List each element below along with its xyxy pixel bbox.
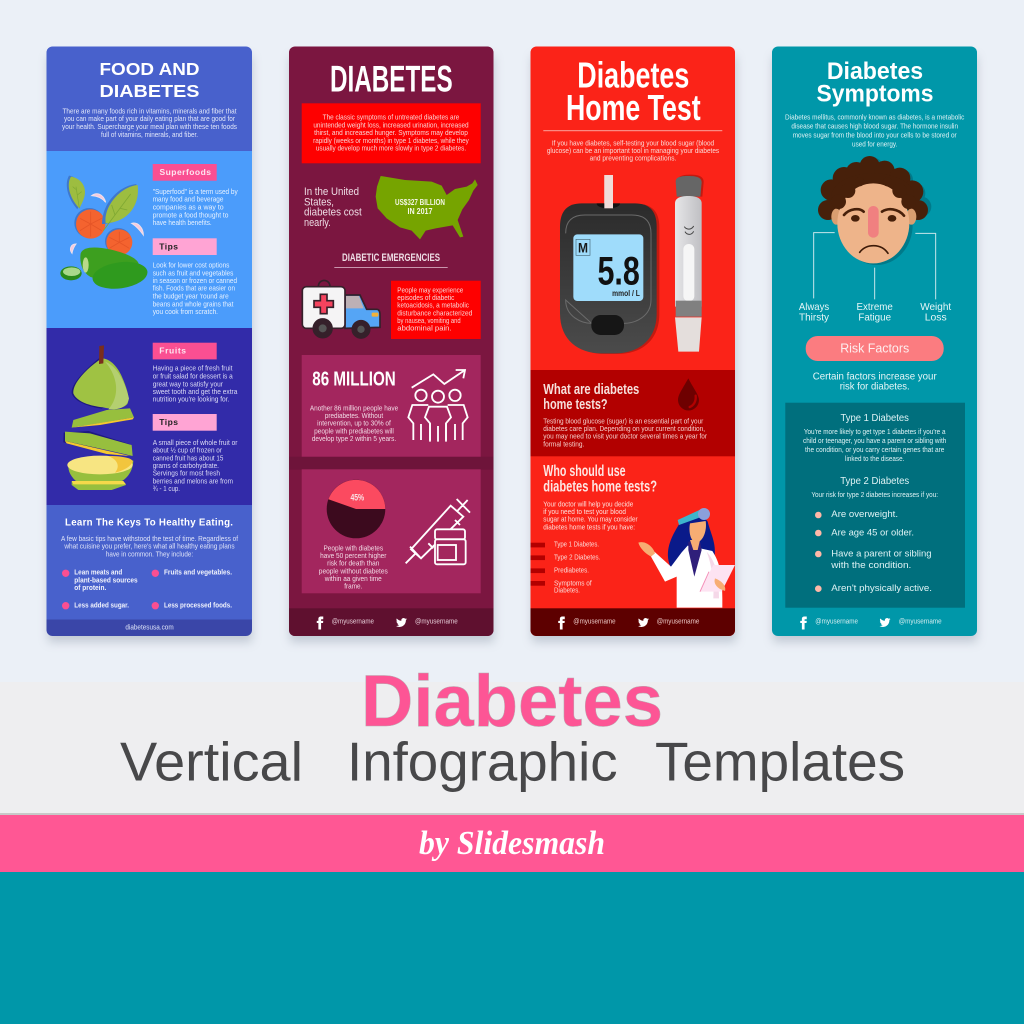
text: type 1 diabetes: child or teenager, you have a parent or sibling with — [803, 438, 946, 445]
text: certain factors — [813, 371, 937, 393]
footer: social handles — [317, 616, 458, 630]
subtitle: vertical infographic templates: Templates — [655, 731, 905, 793]
list: healthy eating bullets: Less added sugar. — [74, 600, 129, 609]
text: what are home tests: diabetes care plan. Depending on your current condition, — [543, 424, 705, 433]
illustration: glucose meter — [560, 175, 659, 354]
footer: social handles: @myusername — [815, 619, 858, 626]
heading: food and diabetes — [100, 63, 199, 97]
band: by slidesmash: by Slidesmash — [419, 825, 605, 862]
panel: 86 million stat: develop type 2 within 5 years. — [312, 434, 396, 443]
text: who should use — [543, 499, 638, 531]
tag: fruit tips — [153, 414, 217, 431]
footer: social handles: @myusername — [573, 619, 616, 626]
intro text — [62, 106, 237, 139]
illustration: glucose meter: mmol / L — [612, 289, 640, 298]
heading: who should use: diabetes home tests? — [543, 479, 657, 496]
text: home test intro: If you have diabetes, self-testing your blood sugar (blood — [552, 138, 714, 147]
panel: risk of death stat — [302, 469, 481, 593]
heading: diabetes home test: Diabetes — [577, 54, 689, 95]
text: symptoms intro: used for energy. — [852, 139, 897, 148]
panel: 86 million stat: Another 86 million people have — [310, 403, 398, 412]
list: test conditions: Prediabetes. — [554, 566, 589, 575]
heading: what are home tests — [543, 383, 639, 409]
text: type 2 diabetes: Your risk for type 2 diabetes increases if you: — [811, 492, 938, 499]
text: superfood tips: you cook from scratch. — [153, 307, 218, 316]
band: by slidesmash — [0, 813, 1024, 872]
list: test conditions — [530, 540, 600, 595]
text: superfood tips: fish. Foods that are easier on — [153, 284, 235, 293]
list: test conditions: Diabetes. — [554, 586, 580, 595]
panel: 86 million stat: people with prediabetes will — [314, 426, 394, 435]
text: type 1 diabetes: Type 1 Diabetes — [841, 413, 909, 424]
text: who should use: diabetes home tests if you have: — [543, 522, 635, 531]
labels: symptoms — [799, 301, 951, 323]
icon: ambulance — [302, 280, 380, 338]
heading: what are home tests: home tests? — [543, 396, 608, 413]
list: healthy eating bullets: plant-based sources — [74, 575, 138, 584]
heading: who should use: Who should use — [543, 463, 626, 480]
footer: social handles: @myusername — [899, 619, 942, 626]
callout: classic symptoms: The classic symptoms of untreated diabetes are — [323, 112, 459, 121]
illustration: doctor — [638, 508, 735, 608]
panel: food and diabetes — [46, 46, 252, 636]
chart: 45 percent pie: 45% — [350, 493, 364, 503]
subtitle: vertical infographic templates — [120, 731, 905, 793]
heading: diabetic emergencies: DIABETIC EMERGENCIES — [342, 252, 440, 264]
map: united states cost: IN 2017 — [408, 207, 433, 216]
callout: ketoacidosis: by nausea, vomiting and — [397, 316, 461, 325]
list: healthy eating bullets: of protein. — [74, 583, 106, 592]
text: certain factors: risk for diabetes. — [840, 381, 910, 393]
text: fruit tips: canned fruit has about 15 — [153, 453, 223, 462]
text: superfood tips: beans and whole grains that — [153, 299, 233, 308]
text: type 1 diabetes: You're more likely to get type 1 diabetes if you're a — [804, 429, 946, 436]
callout: ketoacidosis: episodes of diabetic — [397, 293, 455, 302]
tag: fruits: Fruits — [159, 345, 186, 355]
labels: symptoms: Weight — [920, 301, 951, 313]
panel: diabetes home test — [530, 46, 735, 636]
icon: syringe and vial — [406, 499, 470, 564]
panel: diabetes — [289, 46, 494, 636]
text: type 1 diabetes: linked to the disease. — [845, 456, 904, 463]
footer: website: diabetesusa.com — [125, 624, 174, 631]
map: united states cost — [376, 176, 478, 239]
panel: 86 million stat: 86 MILLION — [312, 369, 396, 391]
heading: healthy eating: Learn The Keys To Healthy Eating. — [65, 517, 233, 528]
panel: 86 million stat: prediabetes. Without — [325, 411, 383, 420]
text: healthy eating intro: have in common. They include: — [106, 550, 193, 559]
illustration: sliced pear — [63, 345, 134, 490]
text: superfood definition: have health benefits. — [153, 218, 212, 227]
footer: social handles: @myusername — [657, 619, 699, 626]
callout: classic symptoms: rapidly (weeks or months) in type 1 diabetes, while they — [313, 136, 469, 145]
tag: superfoods: Superfoods — [160, 167, 211, 177]
footer: social handles: @myusername — [332, 619, 374, 626]
text: certain factors: Certain factors increase your — [813, 371, 937, 383]
text: fruits: sweet tooth and get the extra — [153, 387, 238, 396]
text: fruit tips: Servings for most fresh — [153, 469, 220, 478]
subtitle: vertical infographic templates: Vertical — [120, 731, 303, 793]
labels: symptoms: Extreme — [857, 301, 893, 313]
list: test conditions: Symptoms of — [554, 578, 593, 587]
text: type 2 diabetes: Type 2 Diabetes — [840, 476, 909, 487]
illustration: vegetables — [60, 176, 149, 292]
tag: tips — [153, 238, 217, 255]
list: test conditions: Type 2 Diabetes. — [554, 553, 600, 562]
text: type 2 diabetes — [811, 476, 938, 499]
text: fruit tips: berries and melons are from — [153, 476, 233, 485]
text: what are home tests: formal testing. — [543, 440, 584, 449]
text: fruits: nutrition you're looking for. — [153, 395, 229, 404]
text: fruit tips: A small piece of whole fruit or — [153, 438, 238, 447]
list: type 2 risk factors: Aren't physically active. — [831, 583, 932, 594]
text: risk of death: risk for death than — [327, 559, 379, 568]
text: who should use: sugar at home. You may consider — [543, 515, 638, 524]
text: home test intro — [547, 140, 719, 162]
panel: diabetes symptoms — [772, 46, 977, 636]
heading: diabetes home test — [568, 61, 700, 120]
callout: ketoacidosis — [391, 281, 481, 339]
text: what are home tests — [543, 416, 708, 449]
list: type 2 risk factors — [815, 509, 932, 594]
text: superfood tips: Look for lower cost options — [153, 261, 230, 270]
callout: classic symptoms — [302, 103, 481, 163]
list: type 2 risk factors: Are overweight. — [831, 509, 898, 520]
text: symptoms intro — [785, 112, 965, 148]
text: superfood definition: many food and beverage — [153, 195, 223, 204]
heading: diabetes: DIABETES — [330, 59, 453, 100]
text: superfood definition: companies as a way to — [153, 203, 224, 212]
footer: social handles — [800, 616, 942, 630]
text: fruits: great way to satisfy your — [153, 379, 223, 388]
intro text: you can make part of your daily eating plan that are good for — [64, 114, 235, 123]
list: healthy eating bullets: Lean meats and — [74, 568, 122, 577]
text: cost statement: diabetes cost — [304, 207, 362, 219]
text: superfood tips: the budget year 'round are — [153, 292, 229, 301]
heading: what are home tests: What are diabetes — [543, 381, 639, 398]
text: risk of death — [319, 543, 388, 591]
labels: symptoms: Loss — [925, 311, 947, 323]
button: risk factors — [806, 336, 944, 361]
callout: ketoacidosis: ketoacidosis, a metabolic — [397, 301, 469, 310]
heading: diabetes symptoms: Diabetes — [827, 58, 923, 85]
panel: 86 million stat — [302, 355, 481, 457]
text: fruits: or fruit salad for dessert is a — [153, 372, 234, 381]
illustration: glucose meter: M — [578, 240, 588, 256]
button: risk factors: Risk Factors — [840, 341, 909, 355]
subtitle: vertical infographic templates: Infographic — [347, 731, 618, 793]
heading: who should use — [543, 463, 657, 496]
list: type 2 risk factors: with the condition. — [830, 560, 911, 571]
text: healthy eating intro: what cuisine you prefer, here's what all healthy eating plans — [63, 542, 235, 551]
text: fruit tips: about ½ cup of frozen or — [153, 446, 222, 455]
intro text: full of vitamins, minerals, and fiber. — [101, 130, 198, 139]
illustration: sad face — [814, 156, 936, 299]
list: healthy eating bullets — [62, 568, 232, 609]
text: fruits — [153, 364, 238, 404]
text: healthy eating intro: A few basic tips have withstood the test of time. Regardless of — [61, 534, 239, 543]
text: risk of death: within aa given time — [324, 574, 382, 583]
text: cost statement: In the United — [304, 186, 359, 198]
text: risk of death: have 50 percent higher — [320, 551, 387, 560]
heading: diabetes symptoms: Symptoms — [816, 81, 934, 108]
callout: ketoacidosis: People may experience — [397, 285, 463, 294]
panel: 86 million stat: intervention, up to 30% of — [317, 419, 392, 428]
list: test conditions: Type 1 Diabetes. — [554, 540, 599, 549]
tag: fruit tips: Tips — [159, 417, 178, 427]
text: cost statement — [304, 186, 362, 229]
intro text: There are many foods rich in vitamins, minerals and fiber that — [62, 106, 236, 116]
tag: fruits — [153, 343, 217, 359]
icon: people with rising arrow — [408, 370, 468, 442]
text: who should use: Your doctor will help you decide — [543, 499, 633, 508]
tag: superfoods — [153, 164, 217, 181]
icon: blood drop — [678, 378, 699, 410]
text: home test intro: glucose) can be an important tool in managing your diabetes — [547, 146, 719, 155]
text: home test intro: and preventing complications. — [590, 154, 676, 163]
footer: social handles: @myusername — [415, 619, 458, 626]
text: type 1 diabetes — [803, 413, 946, 463]
heading: diabetes symptoms — [816, 58, 934, 108]
chart: 45 percent pie — [327, 480, 385, 538]
callout: classic symptoms: unintended weight loss, increased urination, increased — [313, 120, 469, 129]
text: superfood tips — [153, 261, 237, 316]
list: type 2 risk factors: Are age 45 or older. — [831, 528, 914, 539]
callout: ketoacidosis: abdominal pain. — [397, 324, 452, 333]
list: healthy eating bullets: Fruits and vegetables. — [164, 568, 232, 577]
map: united states cost: US$327 BILLION — [395, 198, 445, 207]
text: symptoms intro: Diabetes mellitus, commonly known as diabetes, is a metabolic — [785, 112, 965, 121]
text: risk of death: people without diabetes — [319, 566, 388, 575]
band: teal base — [0, 872, 1024, 1024]
text: who should use: if you need to test your blood — [543, 507, 626, 516]
heading: food and diabetes: DIABETES — [100, 81, 200, 101]
text: what are home tests: Testing blood glucose (sugar) is an essential part of your — [543, 416, 704, 425]
text: superfood tips: in season or frozen or canned — [153, 276, 237, 285]
text: superfood definition: "Superfood" is a term used by — [153, 187, 238, 196]
footer: social handles — [558, 616, 699, 630]
text: superfood tips: such as fruit and vegetables — [153, 268, 234, 277]
callout: classic symptoms: thirst, and increased hunger. Symptoms may develop — [314, 128, 468, 137]
list: type 2 risk factors: Have a parent or sibling — [831, 549, 932, 560]
callout: classic symptoms: usually develop much more slowly in type 2 diabetes. — [316, 144, 466, 153]
text: fruit tips: ¾ - 1 cup. — [153, 484, 180, 493]
text: cost statement: nearly. — [304, 217, 331, 229]
heading: food and diabetes: FOOD AND — [100, 59, 200, 79]
text: risk of death: People with diabetes — [323, 543, 383, 552]
text: superfood definition: promote a food thought to — [153, 210, 228, 219]
list: healthy eating bullets: Less processed foods. — [164, 600, 232, 609]
intro text: your health. Supercharge your meal plan with these ten foods — [62, 122, 237, 131]
heading: diabetic emergencies — [334, 252, 448, 268]
labels: symptoms: Fatigue — [858, 311, 891, 323]
text: risk of death: frame. — [344, 582, 362, 591]
text: fruit tips: grams of carbohydrate. — [153, 461, 219, 470]
text: fruits: Having a piece of fresh fruit — [153, 364, 232, 373]
text: fruit tips — [153, 438, 238, 493]
text: what are home tests: you may need to visit your doctor several times a year for — [543, 432, 708, 441]
title: diabetes: Diabetes — [361, 661, 663, 742]
text: cost statement: States, — [304, 196, 334, 208]
callout: ketoacidosis: disturbance characterized — [397, 308, 472, 317]
labels: symptoms: Thirsty — [799, 311, 830, 323]
tag: tips: Tips — [159, 241, 178, 251]
text: superfood definition — [153, 187, 238, 227]
text: healthy eating intro — [61, 534, 239, 559]
text: symptoms intro: moves sugar from the blood into your cells to be stored or — [793, 130, 957, 139]
heading: diabetes home test: Home Test — [566, 87, 701, 128]
text: type 1 diabetes: the condition, or you carry certain genes that are — [805, 447, 944, 454]
labels: symptoms: Always — [799, 301, 829, 313]
illustration: glucose meter: 5.8 — [597, 249, 640, 293]
illustration: lancet pen — [675, 175, 704, 352]
text: symptoms intro: disease that causes high blood sugar. The hormone insulin — [791, 121, 958, 130]
